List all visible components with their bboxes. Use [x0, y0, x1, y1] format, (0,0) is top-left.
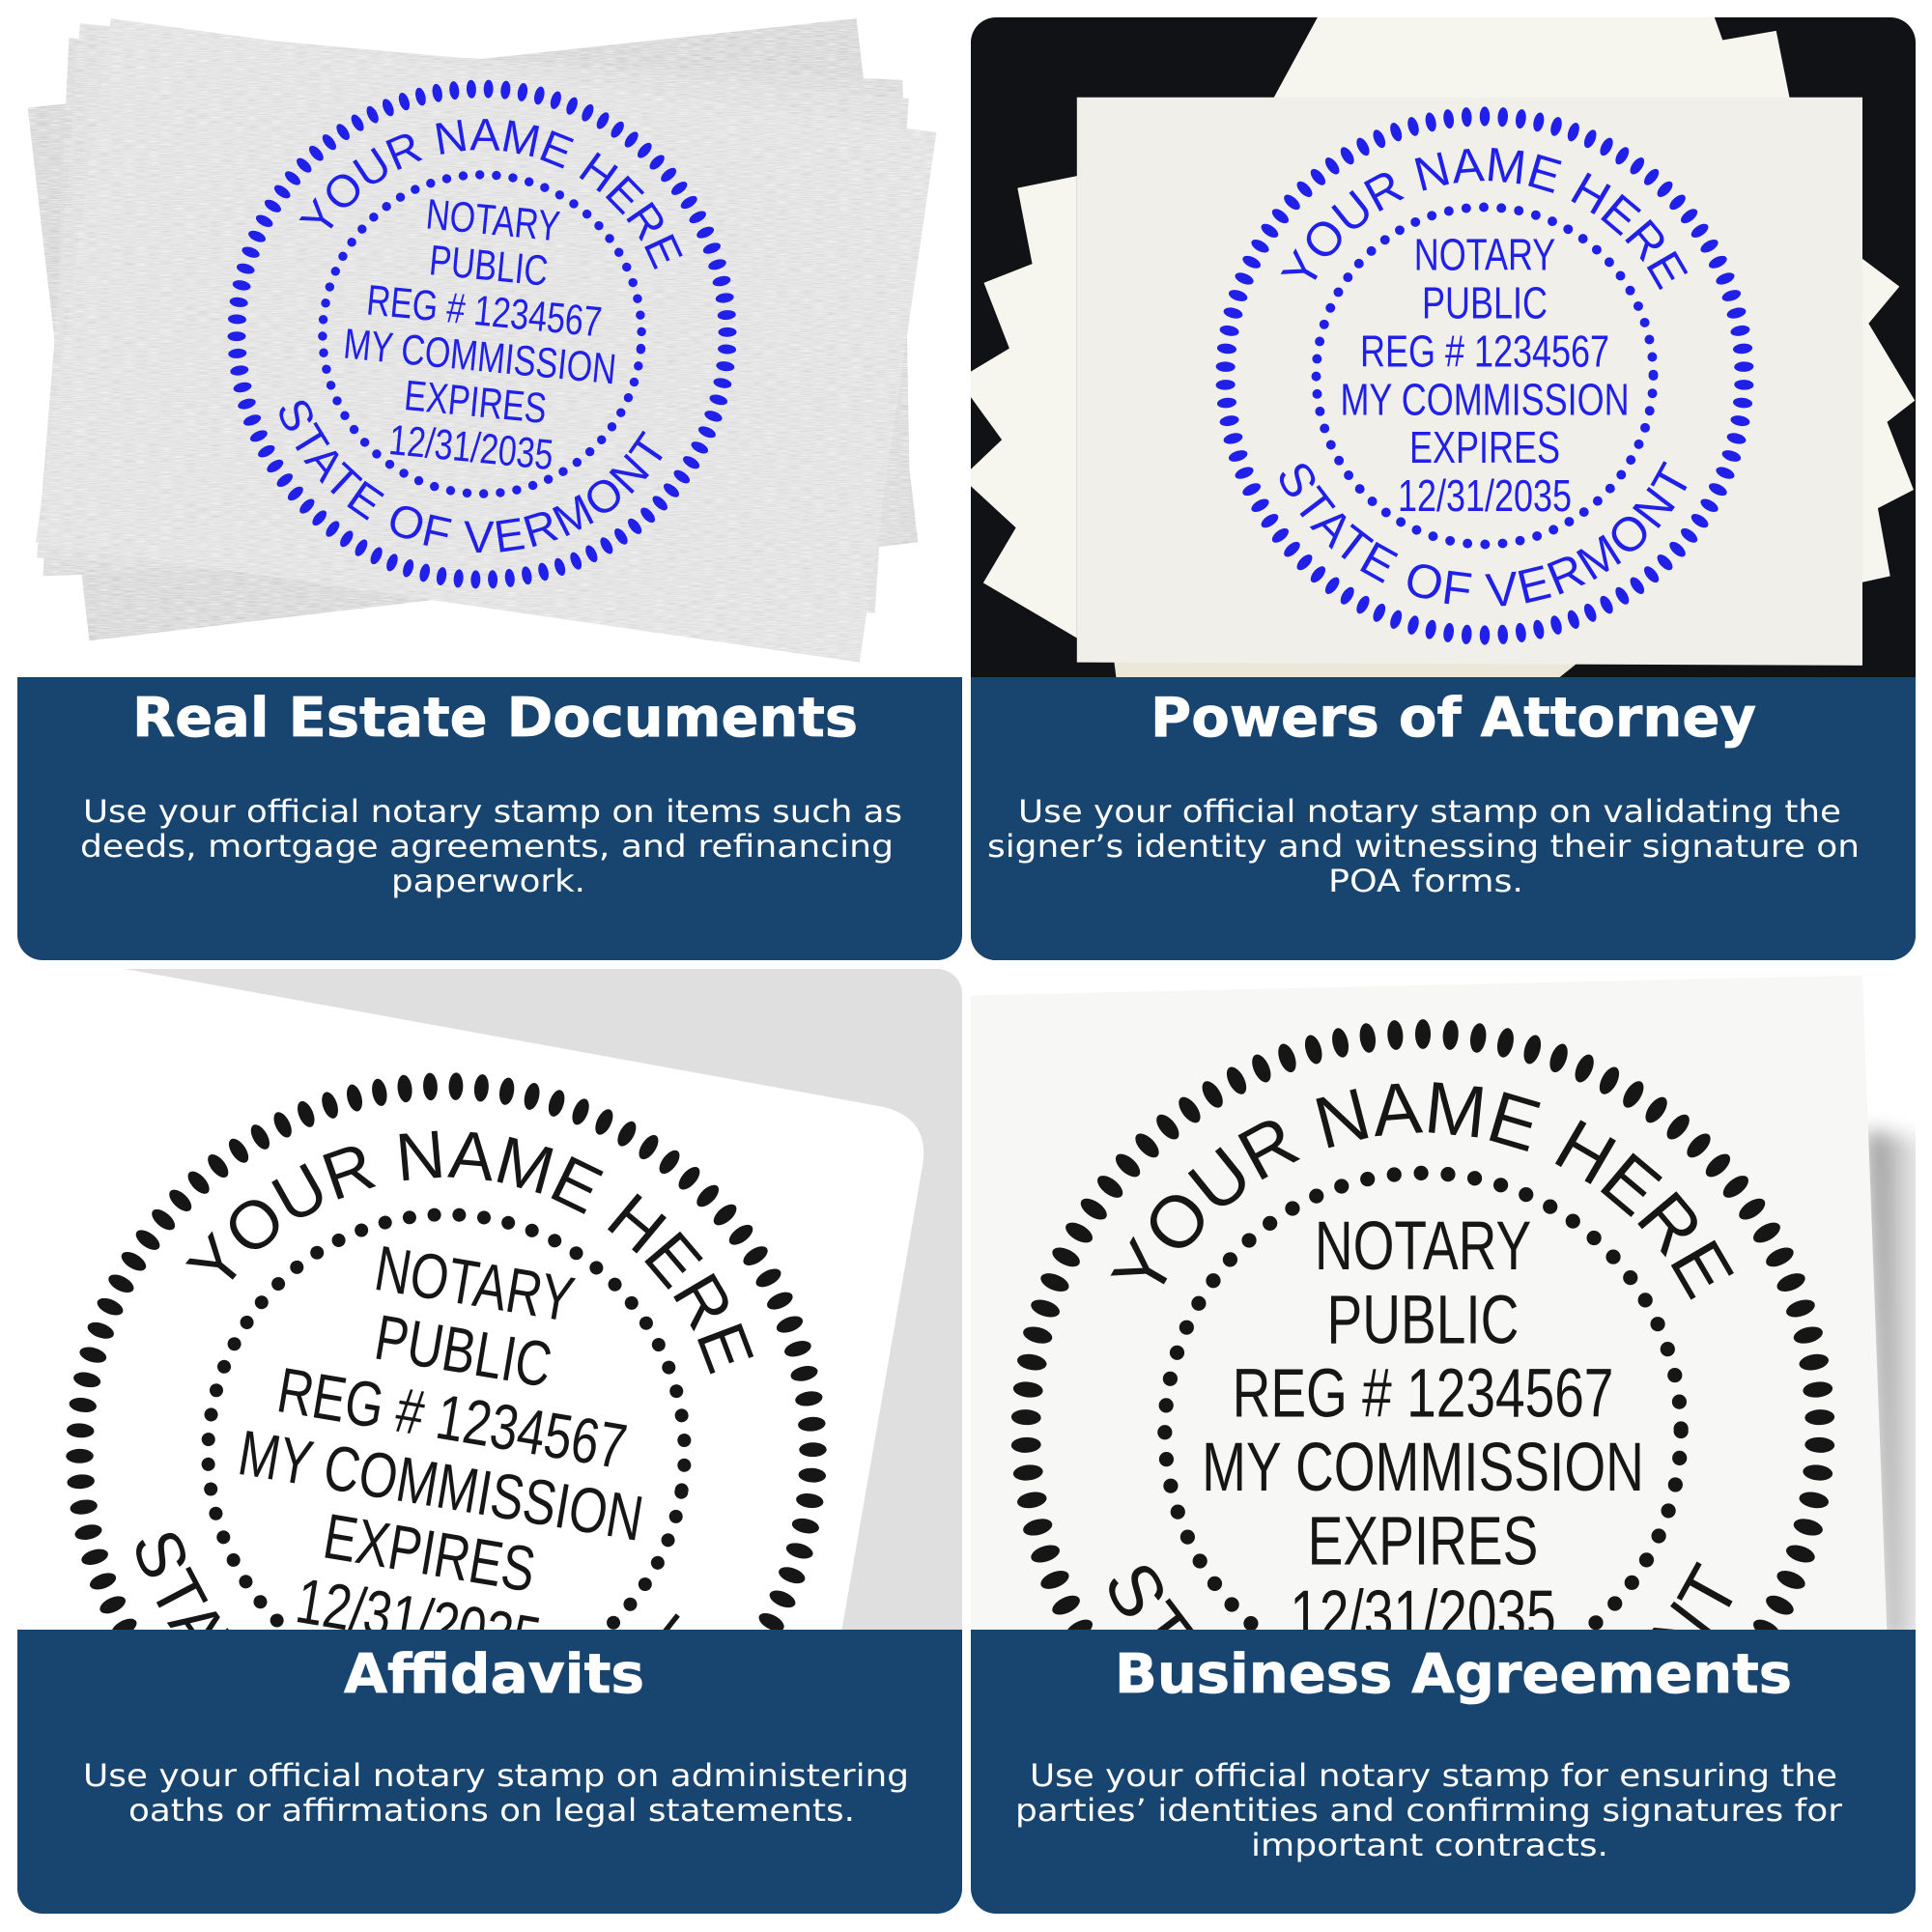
stamp: blue round seal: MY COMMISSION	[1340, 374, 1630, 424]
stamp: blue round seal	[228, 79, 736, 589]
description: oaths or affirmations on legal statements.	[128, 1792, 855, 1829]
stamp: blue round seal	[1215, 106, 1754, 645]
caption bar	[17, 1630, 962, 1914]
stamp: blue round seal: NOTARY	[1414, 229, 1555, 280]
description	[80, 793, 902, 899]
description: important contracts.	[1251, 1827, 1608, 1863]
stamp: blue round seal: MY COMMISSION	[342, 320, 618, 394]
photo: fanned cream sheets	[969, 13, 1915, 684]
description	[1015, 1757, 1843, 1863]
description: Use your official notary stamp on validating the	[1018, 793, 1841, 830]
stamp: black round seal: PUBLIC	[1327, 1280, 1519, 1358]
panel: business agreements	[971, 976, 1916, 1914]
description: signer’s identity and witnessing their signature on	[987, 828, 1860, 865]
heading: Business Agreements	[1115, 1643, 1792, 1706]
stamp: black round seal: MY COMMISSION	[234, 1418, 648, 1554]
stamp: black round seal: EXPIRES	[1308, 1502, 1538, 1579]
stamp: black round seal: YOUR NAME HERE	[1111, 1082, 1734, 1300]
stamp: black round seal: STATE OF VERMONT	[136, 1532, 680, 1630]
stamp: black round seal: NOTARY	[1315, 1207, 1531, 1284]
caption bar	[17, 677, 962, 960]
stamp: black round seal: 12/31/2035	[1290, 1576, 1556, 1654]
stamp: black round seal: REG # 1234567	[272, 1355, 632, 1483]
stamp: blue round seal: YOUR NAME HERE	[299, 119, 683, 270]
stamp: blue round seal: REG # 1234567	[364, 276, 604, 347]
stamp: blue round seal: PUBLIC	[427, 237, 550, 296]
caption bar	[971, 1630, 1916, 1914]
panel: real estate documents	[17, 18, 962, 960]
stamp: black round seal: EXPIRES	[319, 1501, 540, 1605]
stamp: blue round seal: NOTARY	[424, 190, 562, 251]
stamp: black round seal: YOUR NAME HERE	[185, 1130, 753, 1374]
stamp: black round seal: REG # 1234567	[1233, 1354, 1613, 1432]
stamp: black round seal: MY COMMISSION	[1202, 1428, 1644, 1506]
stamp: blue round seal: YOUR NAME HERE	[1281, 148, 1689, 290]
panel: affidavits	[17, 969, 962, 1914]
description: Use your official notary stamp on items such as	[83, 793, 902, 830]
description: paperwork.	[391, 863, 585, 899]
stamp: black round seal	[66, 1072, 827, 1630]
stamp: black round seal: 12/31/2035	[291, 1566, 545, 1676]
stamp: blue round seal: EXPIRES	[402, 372, 549, 433]
stamp: blue round seal: 12/31/2035	[1398, 470, 1572, 521]
stamp: black round seal	[1010, 1019, 1835, 1630]
stamp: black round seal: PUBLIC	[370, 1302, 556, 1401]
stamp: blue round seal: REG # 1234567	[1360, 326, 1609, 376]
stamp: blue round seal: 12/31/2035	[387, 416, 555, 479]
panel: powers of attorney	[971, 17, 1916, 960]
photo: white card on grey	[0, 966, 923, 1634]
caption bar	[971, 677, 1916, 960]
heading: Real Estate Documents	[132, 687, 858, 750]
description: Use your official notary stamp for ensuring the	[1030, 1757, 1837, 1794]
description: deeds, mortgage agreements, and refinancing	[80, 828, 894, 865]
photo: paper with shadow	[966, 976, 1932, 1642]
heading: Powers of Attorney	[1151, 687, 1756, 750]
stamp: blue round seal: PUBLIC	[1422, 277, 1548, 327]
description: Use your official notary stamp on administering	[83, 1757, 909, 1794]
stamp: blue round seal: STATE OF VERMONT	[1279, 461, 1687, 607]
description: POA forms.	[1328, 863, 1523, 899]
stamp: black round seal: STATE OF VERMONT	[1109, 1561, 1733, 1630]
heading: Affidavits	[344, 1643, 644, 1706]
photo: stack of textured paper sheets	[28, 18, 936, 663]
stamp: blue round seal: STATE OF VERMONT	[279, 400, 663, 553]
stamp: blue round seal: EXPIRES	[1409, 422, 1560, 472]
description	[989, 798, 1857, 893]
stamp: black round seal: NOTARY	[370, 1234, 579, 1336]
description	[86, 1762, 906, 1828]
description: parties’ identities and confirming signatures for	[1015, 1792, 1843, 1829]
